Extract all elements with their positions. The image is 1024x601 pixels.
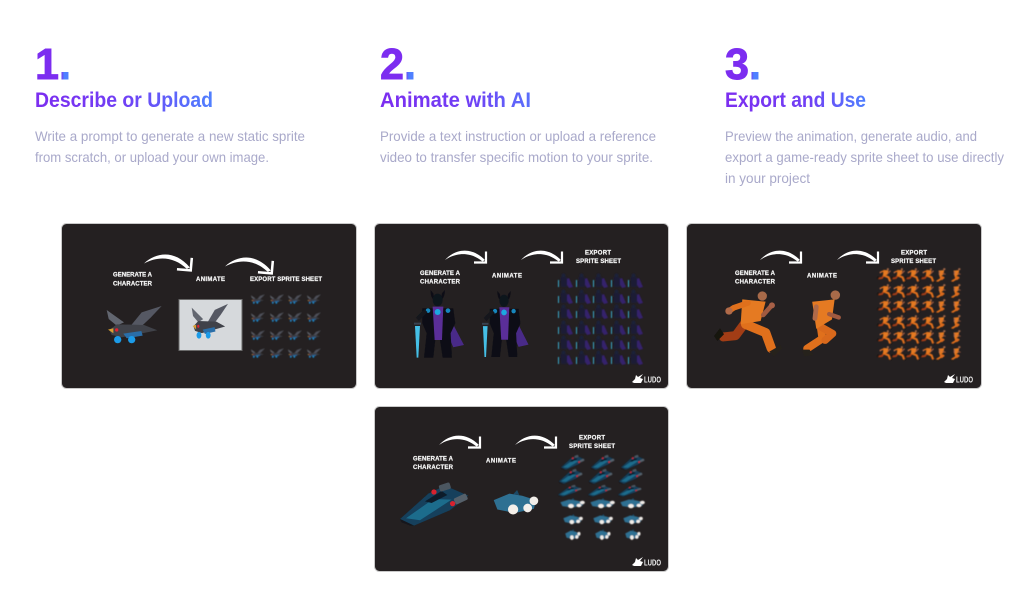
step 1 heading: Describe or Upload [35, 89, 213, 112]
label: export sprite sheet [576, 250, 621, 265]
label: export sprite sheet: SPRITE SHEET [569, 444, 615, 450]
step 2 column [380, 40, 656, 165]
step 3 description: in your project [725, 170, 810, 186]
label: animate: ANIMATE [492, 274, 522, 280]
label: generate a character: CHARACTER [413, 465, 454, 471]
label: generate a character: CHARACTER [420, 280, 461, 286]
sprite: bird character [107, 306, 162, 343]
step 2 description: Provide a text instruction or upload a reference [380, 128, 656, 144]
logo: Ludo [632, 557, 661, 568]
animated spaceship [494, 490, 538, 514]
label: export sprite sheet: SPRITE SHEET [576, 259, 621, 265]
arrow: animate to export [837, 251, 878, 262]
animated bird frame [179, 300, 242, 350]
arrow: generate to animate [144, 253, 192, 270]
animated knight [482, 291, 528, 357]
panel: runner sprite workflow [686, 224, 982, 388]
label: generate a character: GENERATE A [735, 271, 776, 277]
arrow: animate to export [515, 436, 556, 448]
runner sprite sheet [877, 268, 961, 361]
label: export sprite sheet: SPRITE SHEET [891, 259, 936, 265]
sprite: knight character [414, 290, 464, 358]
arrow: animate to export [521, 251, 562, 262]
panel: bird sprite workflow [62, 224, 356, 388]
panel: knight sprite workflow [374, 224, 668, 388]
step 2 description [380, 128, 656, 165]
label: export sprite sheet: EXPORT SPRITE SHEET [250, 277, 322, 283]
label: export sprite sheet [891, 250, 936, 265]
arrow: animate to export [225, 256, 273, 273]
sprite: spaceship character [400, 482, 468, 526]
step 3 description [725, 128, 1004, 186]
sprite: runner character [714, 291, 782, 357]
label: generate a character: CHARACTER [113, 282, 153, 288]
label: generate a character [735, 271, 776, 286]
step 1 description: Write a prompt to generate a new static sprite [35, 128, 305, 144]
step 3 column [725, 40, 1004, 186]
logo: Ludo [632, 374, 661, 384]
arrow: generate to animate [445, 251, 486, 262]
label: export sprite sheet [569, 436, 615, 450]
label: animate: ANIMATE [486, 458, 516, 464]
step 3 description: export a game-ready sprite sheet to use directly [725, 149, 1004, 165]
step 2 number: 2. [380, 40, 416, 89]
label: export sprite sheet: EXPORT [585, 250, 611, 256]
label: generate a character [413, 456, 454, 471]
step 1 description: from scratch, or upload your own image. [35, 149, 269, 165]
step 1 number: 1. [35, 40, 71, 89]
step 3 description: Preview the animation, generate audio, and [725, 128, 977, 144]
step 3 number: 3. [725, 40, 761, 89]
label: generate a character: GENERATE A [413, 456, 454, 462]
label: generate a character: GENERATE A [420, 271, 461, 277]
step 2 heading: Animate with AI [380, 89, 531, 112]
bird sprite sheet [251, 294, 321, 358]
arrow: generate to animate [439, 436, 480, 448]
label: generate a character [113, 272, 153, 288]
label: animate: ANIMATE [807, 274, 837, 280]
step 1 column [35, 40, 305, 165]
label: generate a character: GENERATE A [113, 272, 153, 278]
label: export sprite sheet: EXPORT [901, 250, 927, 256]
step 3 heading: Export and Use [725, 89, 866, 112]
label: animate: ANIMATE [196, 277, 225, 283]
panel: spaceship sprite workflow [374, 406, 668, 572]
spaceship sprite sheet [558, 455, 645, 540]
step 2 description: video to transfer specific motion to your sprite. [380, 149, 653, 165]
label: generate a character [420, 271, 461, 286]
label: export sprite sheet: EXPORT [579, 436, 605, 442]
logo: Ludo [944, 374, 973, 384]
animated runner [802, 290, 840, 356]
knight sprite sheet [558, 274, 643, 365]
arrow: generate to animate [760, 251, 801, 262]
step 1 description [35, 128, 305, 165]
label: generate a character: CHARACTER [735, 280, 776, 286]
